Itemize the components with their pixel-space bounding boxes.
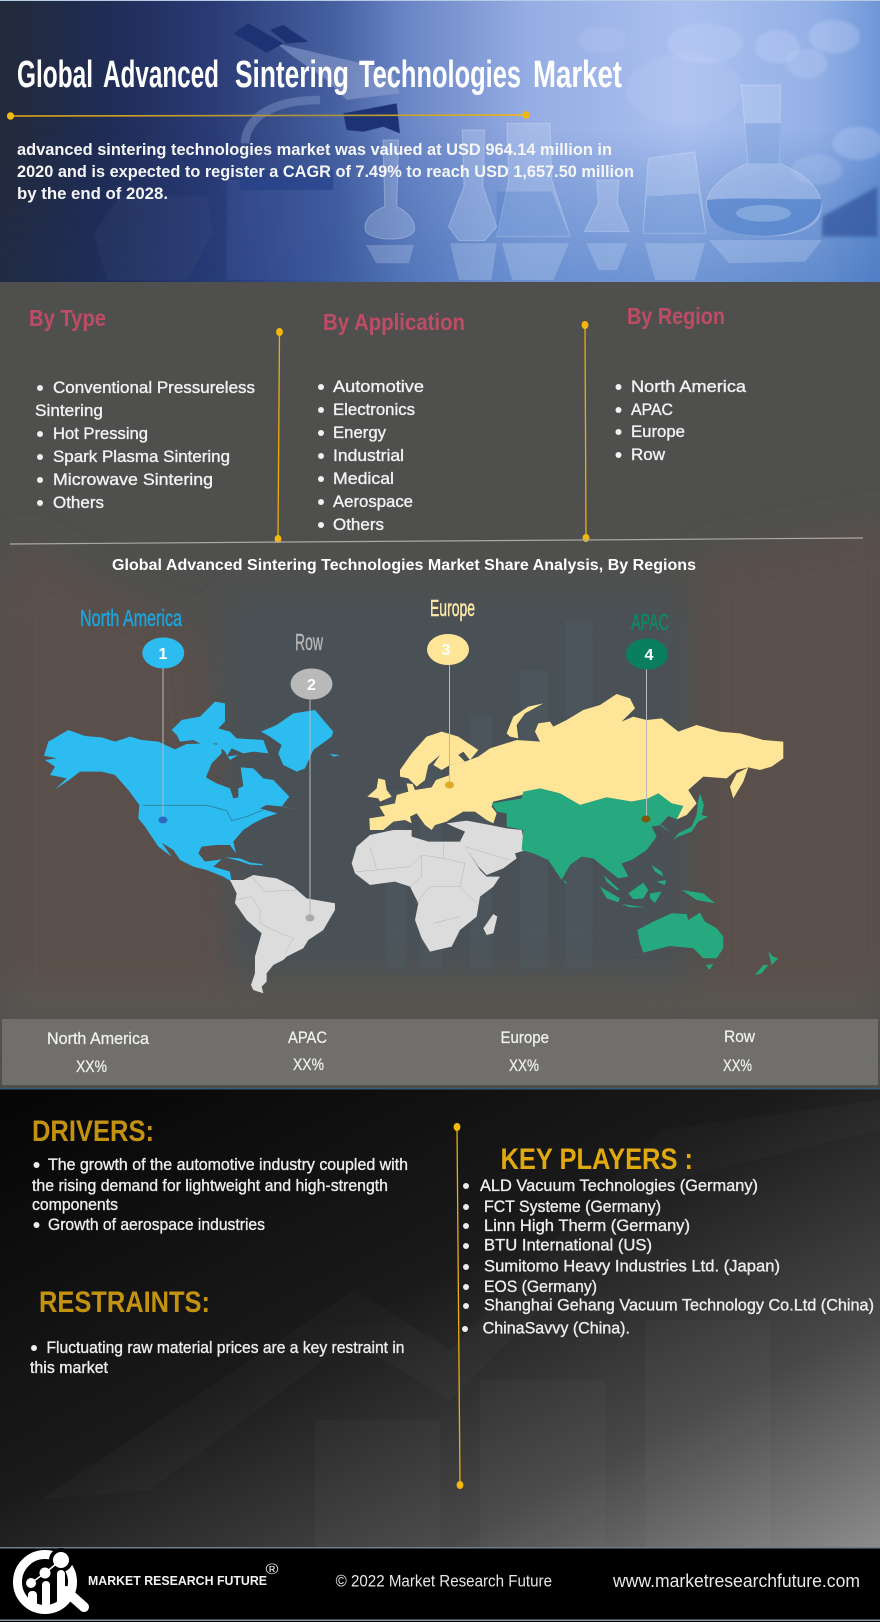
text: restraints list	[30, 1338, 404, 1377]
list: types	[35, 378, 255, 512]
text: drivers list: The growth of the automotive industry coupled with	[48, 1155, 408, 1174]
title: Market	[533, 54, 622, 96]
list: types: Sintering	[35, 401, 103, 420]
list: regions	[616, 377, 747, 464]
text: restraints list: this market	[30, 1358, 108, 1377]
list: applications: Aerospace	[333, 492, 413, 511]
table: regional share	[2, 1019, 878, 1085]
list: key players: FCT Systeme (Germany)	[484, 1197, 661, 1216]
map: north america	[44, 702, 340, 882]
panel: by application	[318, 309, 465, 534]
title: Sintering	[235, 54, 349, 96]
map: europe and russia	[367, 694, 783, 830]
label: europe: Europe	[430, 595, 475, 621]
list: applications: Medical	[333, 469, 394, 488]
panel: segmentation and map background	[0, 282, 880, 1089]
title: Technologies	[359, 54, 521, 96]
brand name: MARKET RESEARCH FUTURE	[88, 1573, 267, 1588]
list: key players: BTU International (US)	[484, 1236, 652, 1254]
table: regional share: Europe	[500, 1028, 549, 1047]
market description: by the end of 2028.	[17, 184, 168, 203]
hero photo: glassware	[365, 20, 880, 280]
list: key players: ChinaSavvy (China).	[483, 1319, 630, 1338]
text: drivers list	[32, 1155, 408, 1234]
table: regional share: APAC	[288, 1028, 327, 1047]
panel: drivers restraints and key players	[0, 1088, 880, 1550]
list: key players: EOS (Germany)	[484, 1277, 597, 1296]
title: Global	[17, 54, 93, 96]
list: applications	[318, 377, 424, 534]
title	[17, 54, 622, 96]
list: key players: ALD Vacuum Technologies (Germany)	[480, 1176, 758, 1195]
list: key players	[462, 1176, 874, 1338]
text: drivers list: Growth of aerospace industries	[48, 1215, 265, 1234]
pin 4: apac	[626, 609, 669, 822]
market description: advanced sintering technologies market was valued at USD 964.14 million in	[17, 140, 612, 159]
list: key players: Sumitomo Heavy Industries Ltd. (Japan)	[484, 1256, 780, 1276]
heading: by region: By Region	[627, 303, 725, 329]
list: types: Hot Pressing	[53, 424, 148, 443]
footer	[0, 1547, 880, 1622]
list: regions: Row	[631, 445, 666, 464]
table: regional share: XX%	[723, 1056, 752, 1075]
copyright: © 2022 Market Research Future	[336, 1572, 552, 1590]
panel: by type	[29, 305, 255, 512]
divider: application and region	[582, 321, 589, 542]
table: regional share: North America	[47, 1029, 150, 1048]
registered mark: ®	[266, 1561, 278, 1578]
list: regions: Europe	[631, 422, 685, 441]
hero photo: microscope	[93, 23, 400, 280]
heading: by application: By Application	[323, 309, 465, 335]
label: row: Row	[295, 629, 323, 655]
divider: type and application	[275, 328, 283, 543]
list: applications: Energy	[333, 423, 386, 442]
heading: market share analysis: Global Advanced Sintering Technologies Market Share Analysis, By Regions	[112, 557, 696, 574]
list: regions: APAC	[631, 400, 673, 419]
label: north america: North America	[80, 605, 182, 631]
world map	[44, 694, 783, 993]
list: applications: Automotive	[333, 377, 424, 396]
table: regional share: Row	[724, 1027, 756, 1046]
list: types: Microwave Sintering	[53, 470, 213, 489]
panel: hero header	[0, 0, 880, 282]
map: south america	[230, 875, 335, 993]
map: apac	[492, 788, 778, 975]
heading: key players: KEY PLAYERS :	[500, 1143, 693, 1176]
pin 4: apac: 4	[645, 647, 654, 664]
website: www.marketresearchfuture.com	[612, 1571, 860, 1591]
list: types: Others	[53, 493, 104, 512]
pin 3: europe	[427, 595, 475, 788]
list: applications: Industrial	[333, 446, 404, 465]
table: regional share: XX%	[293, 1055, 324, 1074]
table: regional share: XX%	[76, 1057, 107, 1076]
divider: vertical gold line	[454, 1123, 463, 1489]
label: apac: APAC	[631, 609, 669, 635]
list: types: Conventional Pressureless	[53, 378, 255, 397]
heading: drivers: DRIVERS:	[32, 1115, 154, 1148]
pin 2: row	[290, 629, 332, 922]
title: Advanced	[103, 54, 219, 96]
table: regional share: XX%	[509, 1056, 539, 1075]
list: applications: Electronics	[333, 400, 415, 419]
pin 2: row: 2	[307, 677, 316, 694]
pin 1: north america	[80, 605, 184, 824]
text: drivers list: components	[32, 1195, 118, 1214]
panel: by region	[616, 303, 747, 464]
map: africa and middle east	[352, 821, 526, 952]
icon: market research future logo	[18, 1548, 84, 1610]
list: applications: Others	[333, 515, 384, 534]
market description: 2020 and is expected to register a CAGR of 7.49% to reach USD 1,657.50 million	[17, 162, 634, 181]
pin 1: north america: 1	[159, 646, 168, 663]
list: regions: North America	[631, 377, 747, 396]
market description	[17, 140, 634, 203]
heading: restraints: RESTRAINTS:	[39, 1286, 210, 1319]
gold divider	[7, 111, 530, 120]
text: drivers list: the rising demand for lightweight and high-strength	[32, 1176, 388, 1195]
list: types: Spark Plasma Sintering	[53, 447, 230, 466]
pin 3: europe: 3	[442, 642, 451, 659]
text: restraints list: Fluctuating raw material prices are a key restraint in	[46, 1338, 404, 1357]
list: key players: Linn High Therm (Germany)	[484, 1216, 690, 1235]
heading: by type: By Type	[29, 305, 106, 331]
